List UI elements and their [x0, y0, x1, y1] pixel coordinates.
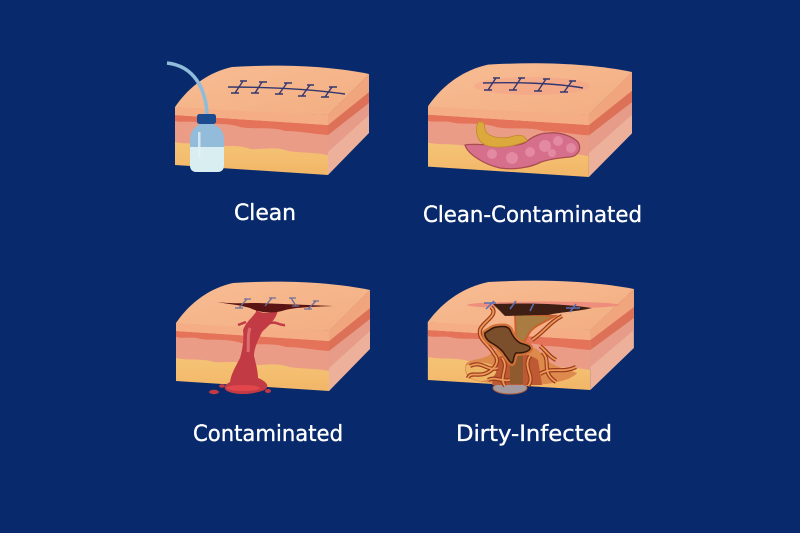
- label: Clean: Clean: [234, 201, 296, 226]
- infected patches: [492, 354, 542, 385]
- pus pool: [493, 382, 527, 394]
- label: Clean-Contaminated: Clean-Contaminated: [423, 203, 642, 228]
- dark wound slit: [493, 303, 592, 316]
- sutures: clean-contaminated: [483, 78, 583, 92]
- panel: contaminated wound: [176, 282, 370, 447]
- tendrils of infection: [468, 307, 576, 386]
- yellow fat lumps: [466, 362, 496, 381]
- necrotic blob: [485, 326, 530, 363]
- sutures: dirty-infected: [484, 301, 580, 312]
- sutures: clean: [228, 81, 345, 97]
- icon: irrigation bottle with tube: [167, 63, 224, 172]
- redness around wound: [467, 302, 619, 308]
- organ: pancreas: [465, 133, 580, 169]
- label: Dirty-Infected: Dirty-Infected: [456, 422, 612, 447]
- tan slough wedge: [515, 314, 555, 342]
- skin block: clean: [175, 66, 369, 175]
- organ highlights: [487, 136, 576, 164]
- panel: clean-contaminated wound: [423, 63, 642, 228]
- blood stream and pool: [209, 310, 285, 394]
- wound slit: [217, 302, 333, 312]
- skin block: contaminated: [176, 282, 370, 391]
- redness around sutures: [474, 77, 590, 95]
- label: Contaminated: Contaminated: [193, 422, 343, 447]
- brown central column: [510, 345, 523, 384]
- organ: yellow duct: [476, 122, 527, 147]
- panel: clean wound: [167, 63, 369, 226]
- skin block: dirty-infected: [428, 281, 634, 390]
- skin block: clean-contaminated: [428, 63, 632, 177]
- infected lower mass: [465, 346, 577, 385]
- panel: dirty-infected wound: [428, 281, 634, 447]
- sutures: contaminated: [235, 298, 319, 309]
